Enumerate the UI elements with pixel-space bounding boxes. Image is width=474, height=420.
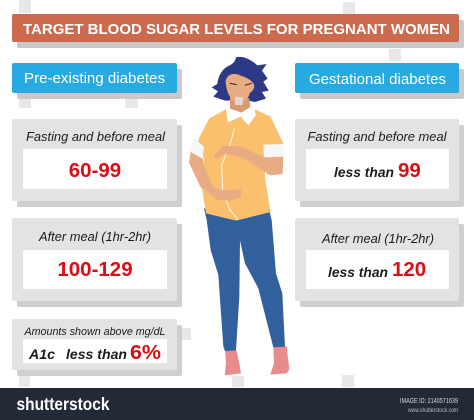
- hair: [212, 57, 269, 102]
- shirt: [197, 109, 284, 221]
- panel: gestational fasting: 99: [398, 159, 421, 182]
- heading: gestational diabetes: [295, 63, 464, 99]
- panel: pre-existing fasting: 60-99: [69, 159, 121, 182]
- heading: pre-existing diabetes: [12, 63, 182, 99]
- jeans and socks: [204, 207, 289, 375]
- panel: pre-existing after meal: 100-129: [57, 258, 133, 281]
- illustration: pregnant woman: [189, 57, 289, 375]
- panel: gestational after meal: After meal (1hr-2hr): [321, 231, 434, 246]
- right arm and hand: [214, 146, 283, 175]
- panel: gestational fasting: Fasting and before meal: [308, 129, 448, 144]
- panel: gestational fasting: less than: [334, 164, 394, 180]
- footer bar: IMAGE ID: 2140571639: [400, 398, 458, 405]
- panel: A1c: A1c: [28, 346, 55, 362]
- panel: gestational after meal: [295, 218, 464, 307]
- footer bar: shutterstock: [16, 394, 110, 414]
- heading: gestational diabetes: Gestational diabetes: [309, 71, 446, 88]
- panel: A1c: 6%: [130, 342, 161, 364]
- title banner: [12, 14, 464, 48]
- panel: gestational fasting: [295, 119, 464, 207]
- panel: A1c: Amounts shown above mg/dL: [24, 326, 165, 338]
- upper body: [189, 57, 285, 221]
- panel: A1c: [12, 319, 182, 376]
- panel: pre-existing fasting: Fasting and before meal: [26, 129, 166, 144]
- panel: gestational after meal: 120: [392, 258, 426, 281]
- panel: A1c: less than: [66, 346, 127, 362]
- title banner: TARGET BLOOD SUGAR LEVELS FOR PREGNANT WOMEN: [23, 21, 450, 38]
- heading: pre-existing diabetes: Pre-existing diabetes: [24, 70, 165, 87]
- panel: pre-existing fasting: [12, 119, 182, 207]
- panel: pre-existing after meal: After meal (1hr-2hr): [38, 229, 151, 244]
- neck and face: [230, 97, 251, 118]
- footer bar: www.shutterstock.com: [407, 408, 458, 414]
- left arm and lower hand: [189, 152, 241, 201]
- footer bar: [0, 388, 474, 420]
- sleeve cuffs: [190, 138, 204, 159]
- panel: pre-existing after meal: [12, 218, 182, 307]
- panel: gestational after meal: less than: [328, 264, 388, 280]
